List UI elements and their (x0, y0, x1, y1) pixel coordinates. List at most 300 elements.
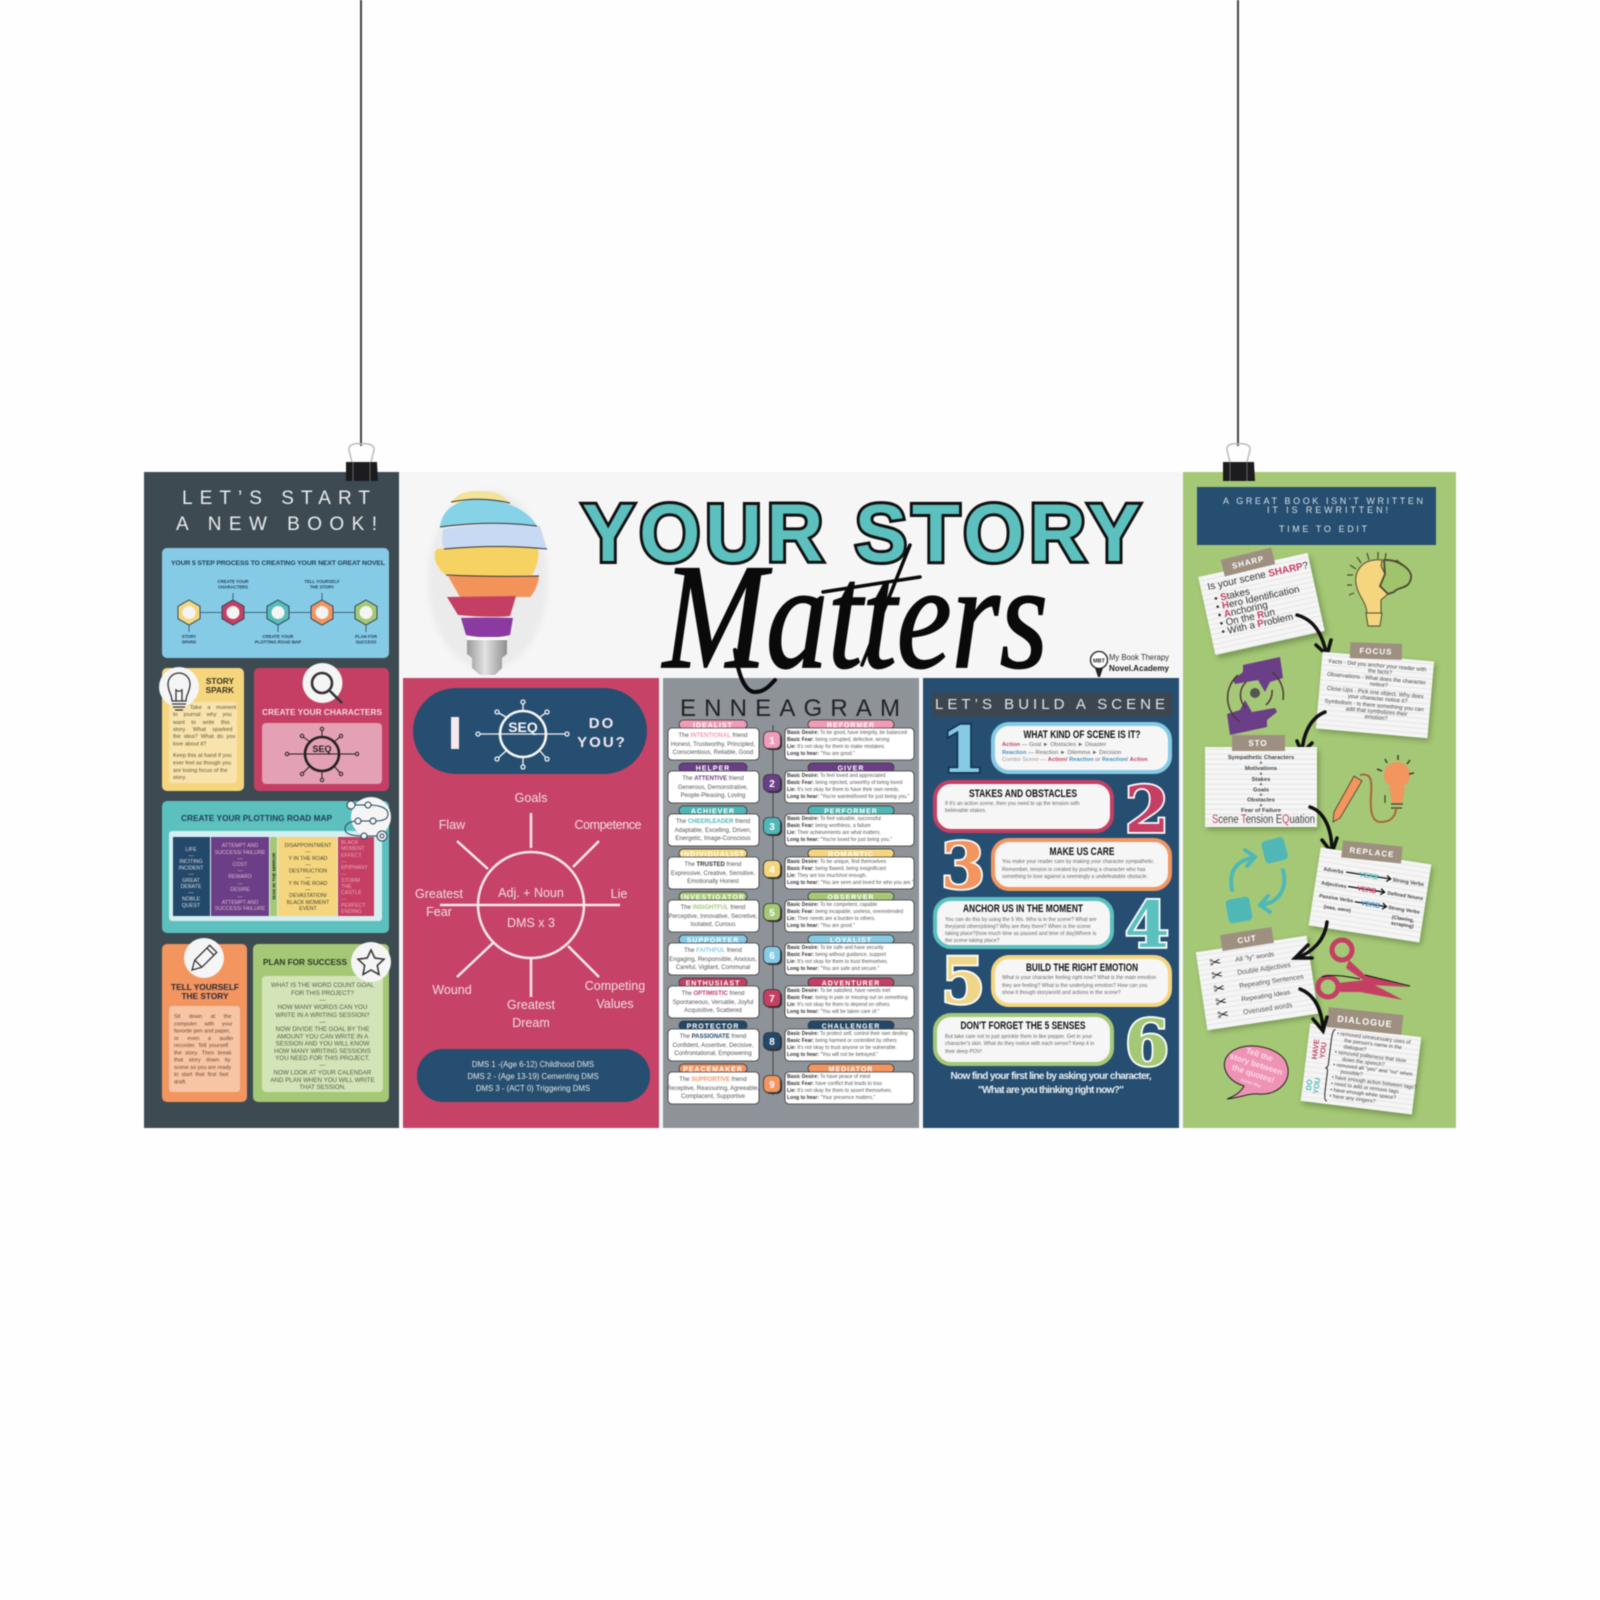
text block: goal questions: FOR THIS PROJECT? (291, 990, 354, 997)
scene step 2 (935, 773, 1169, 848)
enneagram type 6: Careful, Vigilant, Communal (676, 965, 750, 971)
heading: let's start: A NEW BOOK! (176, 514, 377, 535)
panel: time to edit (1183, 472, 1456, 1128)
enneagram type 1: Conscientious, Reliable, Good (673, 750, 753, 756)
enneagram type 1: Lie: It's not okay for them to make mistakes. (787, 744, 885, 750)
text block: tell the story (174, 1014, 233, 1085)
enneagram type 1: The INTENTIONAL friend (678, 733, 748, 739)
character wheel diagram: Competence (574, 818, 642, 832)
enneagram type 3: The CHEERLEADER friend (676, 819, 750, 825)
note: dialogue: down the speech? (1342, 1057, 1385, 1068)
enneagram type 9: Receptive, Reassuring, Agreeable, (667, 1086, 760, 1092)
note: replace: scraping) (1390, 921, 1414, 930)
note: focus (1316, 652, 1436, 741)
road map columns: MAN IN THE MIRROR (272, 852, 276, 899)
enneagram type 2: Basic Desire: To feel loved and appreciated (787, 773, 886, 779)
icon: SEQ wheel: SEQ (312, 744, 332, 754)
icon: road map path (345, 797, 391, 841)
road map columns: ENDING (341, 909, 362, 915)
text block: tell the story: that story down by (174, 1058, 231, 1064)
enneagram type 7 (668, 978, 914, 1018)
enneagram type 4: Long to hear: "You are seen and loved for who you are." (787, 880, 914, 886)
panel: story spark (159, 667, 244, 791)
enneagram type 5: Perceptive, Innovative, Secretive, (668, 914, 758, 920)
enneagram type 9: 9 (769, 1080, 775, 1091)
enneagram type 3: ACHIEVER (691, 808, 735, 816)
scene step 1: Reaction — Reaction ► Dilemma ► Decision (1002, 750, 1121, 756)
binder clip left (346, 444, 378, 481)
enneagram type 5: Basic Desire: To be competent, capable (787, 902, 877, 908)
road map columns: GREAT (182, 878, 201, 884)
text block: story spark (172, 705, 237, 781)
road map columns (173, 837, 374, 916)
note: sto: Stakes (1252, 777, 1270, 783)
enneagram type 6: The FAITHFUL friend (684, 948, 742, 954)
text block: story spark: want to write this (172, 720, 230, 726)
enneagram type 7: Lie: It's not okay for them to depend on others. (787, 1002, 891, 1008)
text block: story spark: to journal why you (173, 712, 232, 718)
character wheel diagram (415, 791, 645, 1030)
road map columns: EPIPHANY (341, 865, 368, 871)
panel: tell yourself the story: TELL YOURSELF (171, 982, 239, 992)
enneagram type 6: Long to hear: "You are safe and secure." (787, 966, 880, 972)
text block: goal questions: AND PLAN WHEN YOU WILL WRITE (270, 1077, 375, 1084)
note: dialogue: YOU (1311, 1077, 1322, 1094)
enneagram type 3: PERFORMER (824, 808, 878, 816)
scene step 5: 5 (941, 944, 985, 1019)
scene step 1: Action — Goal ► Obstacles ► Disaster (1002, 742, 1106, 748)
tag: cut (1220, 927, 1274, 951)
panel: let's build a scene (923, 678, 1179, 1128)
callout: tell the story between the quotes: story between (1229, 1052, 1284, 1077)
icon: pencil (184, 938, 224, 978)
scene step 4: ANCHOR US IN THE MOMENT (963, 903, 1083, 915)
scene step 6: 6 (1125, 1006, 1169, 1081)
road map columns: Y IN THE ROAD (289, 881, 328, 887)
note: focus: your character notice it? (1348, 694, 1408, 705)
text block: story spark: story. (173, 775, 187, 781)
step labels: SUCCESS (356, 640, 377, 644)
enneagram type 3: Long to hear: "You're loved for just being you." (787, 837, 892, 843)
enneagram type 1: 1 (769, 736, 775, 747)
enneagram type 8: Confident, Assertive, Decisive, (672, 1043, 754, 1049)
road map columns: — (237, 894, 243, 900)
text block: goal questions: THAT SESSION. (299, 1084, 346, 1091)
road map columns: QUEST (182, 903, 201, 909)
road map columns: NOBLE (182, 896, 200, 902)
note: focus: add that symbolizes their (1345, 707, 1408, 718)
scene step 4 (935, 888, 1169, 963)
note: replace: VERB (1360, 900, 1381, 910)
tag: sharp: SHARP (1231, 554, 1265, 571)
tag: replace (1341, 840, 1403, 864)
character wheel diagram: DMS x 3 (507, 916, 555, 930)
enneagram type 3: 3 (769, 822, 775, 833)
enneagram type 7: Spontaneous, Versatile, Joyful (673, 1000, 753, 1006)
character wheel diagram: Wound (432, 983, 472, 997)
enneagram type 5: Lie: Their needs are a burden to others. (787, 916, 876, 922)
enneagram type 2: Long to hear: "You're wanted/loved for just being you." (787, 794, 910, 800)
enneagram type 5: The INSIGHTFUL friend (681, 905, 745, 911)
step labels: CREATE YOUR (263, 634, 294, 639)
heading: build a scene: LET’S BUILD A SCENE (935, 696, 1165, 713)
enneagram type 1 (668, 720, 914, 760)
enneagram type 4: Expressive, Creative, Sensitive, (671, 871, 756, 877)
character wheel diagram: Greatest (415, 887, 463, 901)
note: dialogue (1300, 1023, 1423, 1118)
note: focus: notice? (1370, 682, 1388, 689)
note: cut: Overused words (1243, 1002, 1293, 1016)
note: sharp: • Stakes (1213, 586, 1251, 605)
panel: SEQ (403, 678, 659, 1128)
icon: light bulb (159, 667, 199, 710)
enneagram type 8: Confrontational, Empowering (674, 1051, 752, 1057)
panel: tell yourself the story (162, 938, 247, 1102)
enneagram type 2: Basic Fear: being rejected, unworthy of being loved (787, 780, 903, 786)
arrow: sto to replace (1310, 807, 1337, 853)
DMS pill: DMS 3 - (ACT 0) Triggering DMS (476, 1084, 590, 1093)
enneagram type 6: 6 (769, 951, 775, 962)
text block: story spark: ever feel as though you (173, 760, 231, 766)
note: sharp: • Hero Identification (1215, 584, 1301, 613)
note: dialogue: possible? (1340, 1069, 1363, 1078)
note: dialogue: • have any zingers? (1329, 1093, 1376, 1105)
enneagram type 5: OBSERVER (827, 894, 875, 902)
note: sto: + (1259, 760, 1263, 766)
note: focus: Close-Ups - Pick one object. Why does (1327, 686, 1424, 700)
road map columns: — (305, 849, 311, 855)
text block: story spark: Keep this at hand if you (173, 753, 231, 759)
enneagram type 6: SUPPORTER (687, 938, 739, 944)
note: focus: emotion? (1364, 714, 1388, 722)
enneagram type 9 (667, 1064, 914, 1104)
scene step 4: they(and others)doing? Why are they there? When is the scene (945, 924, 1091, 930)
enneagram type 4: 4 (769, 865, 775, 876)
scene step 3: Remember, tension is created by pushing a character who has (1002, 867, 1146, 873)
text block: goal questions (270, 982, 375, 1091)
scene step 1 (941, 713, 1170, 788)
panel: five step process: YOUR 5 STEP PROCESS TO CREATING YOUR NEXT GREAT NOVEL (171, 560, 385, 567)
panel: create your characters: CREATE YOUR CHARACTERS (262, 707, 382, 717)
note: replace: Defined Nouns (1387, 891, 1424, 902)
note: dialogue: YOU (1318, 1042, 1328, 1059)
enneagram type 2 (668, 763, 914, 803)
banner: time to edit: IT IS REWRITTEN! (1267, 505, 1388, 515)
road map columns: — (341, 859, 347, 865)
icon: layered light bulb (428, 490, 548, 675)
enneagram type 7: 7 (769, 994, 775, 1005)
scene step 5: What is your character feeling right now? What is the main emotion (1002, 975, 1156, 981)
road map columns: — (305, 875, 311, 881)
note: dialogue: • have enough white space? (1330, 1087, 1396, 1101)
road map columns: SUCCESS/ FAILURE (215, 906, 266, 912)
note: replace: Adverbs (1323, 867, 1344, 876)
tag: dialogue (1327, 1007, 1403, 1035)
note: replace: VERB (1359, 872, 1379, 882)
road map columns: DISAPPOINTMENT (284, 843, 332, 849)
note: replace: VERB (1357, 885, 1377, 895)
road map columns: DESTRUCTION (289, 868, 327, 874)
enneagram type 5: Long to hear: "You are good." (787, 923, 855, 929)
character wheel diagram: Competing (585, 979, 645, 993)
note: sharp: Is your scene SHARP? (1207, 560, 1310, 593)
enneagram type 4: ROMANTIC (828, 852, 874, 858)
note: cut (1196, 935, 1321, 1033)
panel: story spark: STORY (206, 676, 234, 686)
enneagram type 7: The OPTIMISTIC friend (681, 991, 745, 997)
enneagram type 6: Lie: It's not okay for them to trust themselves. (787, 959, 888, 965)
enneagram type 1: REFORMER (827, 722, 875, 730)
text block: goal questions: NOW LOOK AT YOUR CALENDAR (274, 1070, 372, 1076)
panel: let's start a new book (144, 472, 399, 1128)
text block: story spark: are losing focus of the (173, 768, 228, 774)
scene step 5 (941, 944, 1170, 1019)
road map columns: EVENT (299, 906, 318, 912)
enneagram type 2: People-Pleasing, Loving (681, 793, 745, 799)
enneagram type 1: Honest, Trustworthy, Principled, (671, 742, 755, 748)
poster background (144, 472, 1456, 1128)
enneagram type 6: Basic Desire: To be safe and have security (787, 945, 884, 951)
scene step 6: character's skin. What do they notice with each sense? Keep it in (945, 1041, 1094, 1047)
icon: magnifier (302, 663, 342, 703)
note: cut: ✂ (1216, 1007, 1230, 1024)
road map columns: LIFE (185, 847, 197, 853)
enneagram type 3: Adaptable, Excelling, Driven, (675, 828, 752, 834)
text block: goal questions: YOU NEED FOR THIS PROJECT. (275, 1055, 370, 1062)
text block: story spark: Take a moment (190, 705, 237, 711)
step labels: PLAN FOR (355, 634, 378, 639)
road map columns: — (188, 872, 194, 878)
callout: tell the story between the quotes: -Susan May (1239, 1077, 1262, 1088)
enneagram type 9: MEDIATOR (829, 1066, 873, 1074)
road map columns: INCITING (179, 859, 203, 865)
text block: story spark: story. What sparked (173, 727, 232, 733)
character wheel diagram: Dream (512, 1016, 550, 1030)
road map columns: THE (341, 884, 352, 890)
enneagram type 7: Long to hear: "You will be taken care of." (787, 1009, 880, 1015)
note: cut: Double Adjectives (1237, 962, 1292, 977)
note: cut: ✂ (1212, 980, 1226, 998)
enneagram type 8: Long to hear: "You will not be betrayed." (787, 1052, 878, 1058)
SEQ pill (413, 688, 647, 774)
DMS pill: DMS 2 - (Age 13-19) Cementing DMS (467, 1072, 599, 1081)
enneagram type 8: CHALLENGER (822, 1024, 880, 1030)
icon: star (351, 942, 391, 982)
arrow: focus to sto (1297, 712, 1325, 753)
text block: tell the story: Sit down at the (174, 1014, 231, 1020)
note: replace: Adjectives (1321, 880, 1347, 890)
text block: tell the story: or even a audio (174, 1036, 233, 1042)
tag: sharp (1221, 547, 1275, 577)
enneagram type 9: PEACEMAKER (683, 1066, 743, 1074)
banner: time to edit: TIME TO EDIT (1279, 524, 1368, 534)
heading: let's start (176, 488, 377, 535)
SEQ pill: SEQ (508, 719, 538, 735)
text block: goal questions: SESSION AND YOU WILL KNOW (276, 1040, 370, 1048)
scene step 6 (935, 1006, 1169, 1081)
road map columns: — (188, 890, 194, 896)
enneagram type 5: Basic Fear: being incapable, useless, overextended (787, 909, 903, 915)
enneagram type 7: ADVENTURER (822, 980, 880, 988)
icon: pointing hands (1227, 657, 1283, 735)
binder clip right (1223, 444, 1255, 481)
tag: sto (1232, 735, 1285, 751)
text block: tell the story: recorder. Tell yourself (174, 1043, 229, 1049)
note: replace: (Clawing, (1391, 915, 1415, 924)
enneagram type 1: Basic Desire: To be good, have integrity, be balanced (787, 730, 907, 736)
note: sharp (1198, 552, 1328, 659)
scene step 3 (941, 829, 1170, 904)
road map columns: DEBATE (181, 884, 202, 890)
enneagram type 8: Lie: It's not okay to trust anyone or be vulnerable. (787, 1045, 897, 1051)
logo: novel academy (1090, 652, 1170, 677)
note: cut: Repeating Ideas (1241, 989, 1291, 1003)
text block: story spark: love about it? (173, 742, 206, 748)
enneagram type 9: Complacent, Supportive (681, 1094, 746, 1100)
enneagram type 8: The PASSIONATE friend (680, 1034, 746, 1040)
scene step 4: the scene taking place? (945, 938, 1000, 944)
road map columns: ATTEMPT AND (222, 843, 258, 849)
text block: story spark: the idea? What do you (173, 734, 235, 740)
note: dialogue: • need to add or remove tags (1331, 1081, 1399, 1095)
step labels: SPARK (182, 640, 197, 644)
enneagram type 6: Engaging, Responsible, Anxious, (669, 957, 757, 963)
enneagram type 7: Basic Desire: To be satisfied, have needs met (787, 988, 891, 994)
text block: goal questions: WRITE IN A WRITING SESSION? (275, 1012, 370, 1019)
road map columns: COST (233, 862, 248, 868)
arrow: sharp to focus (1297, 615, 1331, 655)
character wheel diagram: Fear (426, 905, 452, 919)
road map columns: STORM (341, 878, 360, 884)
text block: goal questions: — (319, 1019, 326, 1026)
note: cut: ✂ (1208, 954, 1222, 972)
enneagram type 1: Basic Fear: being corrupted, defective, wrong (787, 737, 890, 743)
enneagram type 3 (668, 806, 914, 846)
panel: five step process (162, 548, 389, 658)
text block: tell the story: the story. Then break (174, 1050, 232, 1056)
road map columns: CASTLE (341, 890, 362, 896)
note: sto: + (1259, 772, 1263, 778)
DMS pill (417, 1049, 650, 1102)
note: dialogue: dialogue? (1343, 1044, 1367, 1053)
road map columns: — (237, 856, 243, 862)
icon: puzzle bulb (1347, 552, 1411, 626)
note: sto: + (1259, 782, 1263, 788)
text block: tell the story: to start that first fast (174, 1072, 229, 1078)
note: sto: + (1259, 792, 1263, 798)
scene step 4: You can do this by using the 5 Ws. Who is in the scene? What are (945, 917, 1097, 923)
note: focus: the facts? (1368, 668, 1392, 676)
enneagram type 1: IDEALIST (693, 722, 733, 730)
panel: plan for success (253, 942, 391, 1102)
road map columns: INCIDENT (178, 866, 204, 872)
road map columns: — (305, 887, 311, 893)
closing prompt (950, 1071, 1152, 1096)
scene step 6: DON'T FORGET THE 5 SENSES (960, 1020, 1086, 1032)
scene step 1: WHAT KIND OF SCENE IS IT? (1024, 729, 1141, 741)
road map columns: — (341, 872, 347, 878)
enneagram type 8: PROTECTOR (687, 1024, 739, 1030)
note: sto: Goals (1253, 788, 1269, 794)
note: dialogue: the person's name in the (1344, 1038, 1402, 1051)
heading: enneagram: ENNEAGRAM (680, 695, 900, 722)
scene step 2: STAKES AND OBSTACLES (969, 788, 1077, 800)
enneagram type 4: Basic Fear: being flawed, being insignificant (787, 866, 887, 872)
road map columns: MOMENT (341, 846, 365, 852)
enneagram type 2: Lie: It's not okay for them to have their own needs. (787, 787, 899, 793)
banner: time to edit (1197, 487, 1436, 545)
road map columns: — (237, 881, 243, 887)
tag: dialogue: DIALOGUE (1337, 1014, 1393, 1029)
road map columns: — (237, 868, 243, 874)
note: cut: ✂ (1214, 994, 1228, 1011)
text block: tell the story: draft. (174, 1079, 187, 1085)
scene step 5: show it though storyworld and actions in the scene? (1002, 990, 1121, 996)
road map columns: — (341, 896, 347, 902)
note: dialogue: • removed politeness that slow (1334, 1050, 1406, 1064)
step labels (182, 579, 378, 644)
character wheel diagram: Goals (515, 791, 547, 805)
road map columns: DEVASTATION/ (289, 893, 327, 899)
step hexagons (178, 600, 377, 625)
note: sharp: • With a Problem (1221, 612, 1294, 638)
note: focus: Symbolism - Is there something you can (1324, 699, 1424, 713)
enneagram type 4: INDIVIDUALIST (681, 852, 745, 858)
note: cut: Repeating Sentences (1239, 973, 1305, 990)
callout: tell the story between the quotes (1223, 1042, 1288, 1099)
road map columns: Y IN THE ROAD (289, 856, 328, 862)
closing prompt: Now find your first line by asking your character, (950, 1071, 1152, 1082)
heading: let's start: LET’S START (182, 488, 370, 509)
enneagram type 3: Basic Fear: being worthless, a failure (787, 823, 871, 829)
road map columns: — (305, 862, 311, 868)
note: focus: Facts - Did you anchor your reader with (1328, 659, 1427, 673)
note: sharp: • On the Run (1219, 607, 1276, 630)
enneagram type 6 (668, 935, 914, 975)
road map columns: DESIRE (230, 887, 250, 893)
enneagram type 5: INVESTIGATOR (681, 894, 745, 902)
title: matters: Matters (661, 534, 1048, 700)
note: sto: Scene Tension EQuation (1212, 814, 1315, 826)
note: replace (1308, 847, 1433, 945)
enneagram type 2: GIVER (838, 766, 864, 772)
text block: tell the story: computer with your (174, 1021, 233, 1027)
tag: focus: FOCUS (1359, 646, 1393, 657)
enneagram type 4 (668, 849, 914, 889)
scene step 5: they are feeling? What is the underlying emotion? How can you (1002, 983, 1147, 989)
callout: tell the story between the quotes: the quotes! (1231, 1063, 1276, 1085)
step labels: PLOTTING ROAD MAP (255, 640, 301, 644)
note: sto (1205, 747, 1319, 830)
scene step 2: If it's an action scene, then you need to up the tension with (945, 801, 1080, 807)
enneagram type 3: Energetic, Image-Conscious (675, 836, 751, 842)
note: cut: ✂ (1210, 967, 1224, 985)
title: your story: YOUR STORY (582, 488, 1145, 579)
enneagram type 8: Basic Fear: being harmed or controlled by others (787, 1038, 897, 1044)
panel: tell yourself the story: THE STORY (181, 991, 229, 1001)
panel: create your characters (254, 663, 389, 791)
enneagram type 7: ENTHUSIAST (686, 980, 740, 988)
enneagram type 9: Long to hear: "Your presence matters." (787, 1095, 876, 1101)
enneagram type 6: Basic Fear: being without guidance, support (787, 952, 887, 958)
note: focus: Observations - What does the character (1327, 672, 1426, 686)
enneagram type 2: 2 (769, 779, 775, 790)
heading: build a scene (932, 693, 1172, 717)
note: dialogue: • removed unnecessary uses of (1337, 1031, 1411, 1046)
text block: goal questions: — (319, 997, 326, 1004)
enneagram type 1: Long to hear: "You are good." (787, 751, 855, 757)
SEQ pill: YOU? (577, 734, 627, 751)
